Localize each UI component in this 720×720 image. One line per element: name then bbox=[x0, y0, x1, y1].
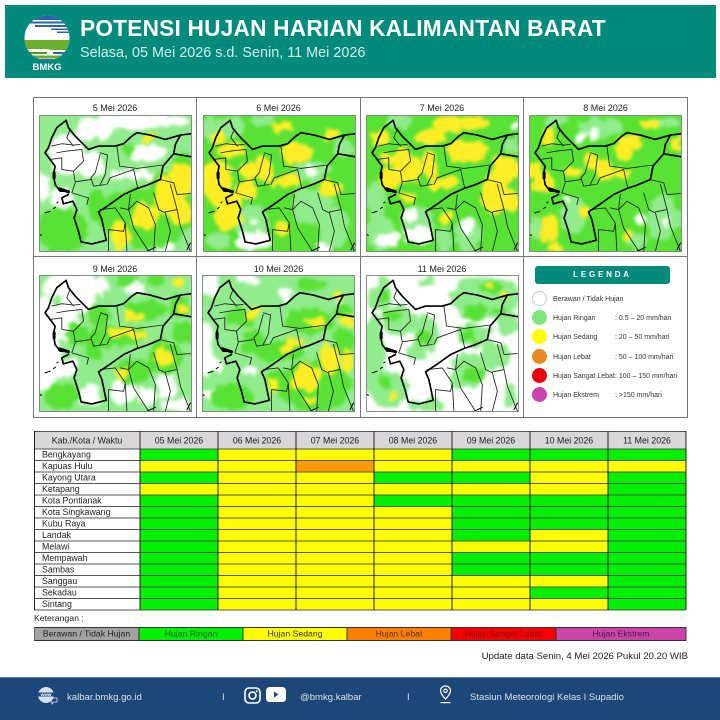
map bbox=[202, 275, 355, 412]
table header: 05 Mei 2026 bbox=[155, 436, 203, 446]
legend title: LEGENDA bbox=[573, 270, 632, 279]
panel: map 10 Mei bbox=[196, 256, 361, 418]
icon: BMKG logo bbox=[24, 16, 70, 73]
category: berawan: Berawan / Tidak Hujan bbox=[43, 628, 130, 638]
legend item: lebat bbox=[532, 349, 673, 364]
date label: 7 Mei 2026 bbox=[420, 103, 464, 113]
legend caption: Keterangan : bbox=[34, 613, 84, 623]
separator: I bbox=[407, 692, 410, 703]
legend item: ringan: Hujan Ringan bbox=[553, 315, 595, 322]
row: Ketapang bbox=[42, 484, 686, 495]
row: Kota Singkawang: Kota Singkawang bbox=[42, 507, 111, 517]
date label: 10 Mei 2026 bbox=[254, 264, 303, 274]
row: Sintang: Sintang bbox=[42, 599, 72, 609]
row: Bengkayang: Bengkayang bbox=[42, 450, 91, 460]
table header: 10 Mei 2026 bbox=[545, 436, 593, 446]
row: Sekadau: Sekadau bbox=[42, 588, 77, 598]
row: Landak bbox=[42, 530, 686, 541]
category: ringan bbox=[139, 628, 243, 640]
legend item: ringan: : 0.5 – 20 mm/hari bbox=[615, 315, 671, 322]
row: Kapuas Hulu bbox=[42, 460, 686, 472]
panel: legend bbox=[523, 256, 688, 418]
date label: 9 Mei 2026 bbox=[93, 264, 137, 274]
category: ekstrem bbox=[556, 628, 686, 640]
panel: map 11 Mei bbox=[360, 256, 524, 418]
legend item: lebat: : 50 – 100 mm/hari bbox=[615, 354, 673, 361]
rain category strip bbox=[34, 627, 686, 641]
row: Kubu Raya bbox=[42, 518, 686, 530]
category: lebat: Hujan Lebat bbox=[376, 628, 423, 638]
row: Mempawah: Mempawah bbox=[42, 553, 88, 563]
table header: 08 Mei 2026 bbox=[389, 436, 437, 446]
category: ekstrem: Hujan Ekstrem bbox=[593, 628, 649, 638]
date label: 5 Mei 2026 bbox=[93, 103, 137, 113]
map bbox=[39, 115, 192, 252]
legend item: sangat lebat: Hujan Sangat Lebat bbox=[553, 373, 615, 380]
row: Sanggau bbox=[42, 576, 686, 587]
row: Kapuas Hulu: Kapuas Hulu bbox=[42, 461, 92, 471]
panel: map 5 Mei bbox=[33, 97, 197, 257]
panel: map 6 Mei bbox=[196, 97, 361, 257]
row: Sambas bbox=[42, 564, 686, 576]
table header: 06 Mei 2026 bbox=[233, 436, 281, 446]
legend item: sedang: : 20 – 50 mm/hari bbox=[615, 334, 669, 341]
map bbox=[203, 115, 356, 252]
legend item: sedang bbox=[532, 329, 669, 344]
legend title bbox=[535, 266, 670, 284]
row: Landak: Landak bbox=[42, 530, 71, 540]
legend item: lebat: Hujan Lebat bbox=[553, 354, 591, 361]
date label: 11 Mei 2026 bbox=[418, 264, 466, 274]
row: Bengkayang bbox=[42, 449, 686, 460]
icon: website bbox=[38, 687, 58, 705]
row: Ketapang: Ketapang bbox=[42, 484, 80, 494]
map bbox=[529, 115, 682, 252]
table header: 07 Mei 2026 bbox=[311, 436, 359, 446]
row: Sambas: Sambas bbox=[42, 564, 75, 574]
row: Melawi bbox=[42, 541, 686, 552]
row: Sanggau: Sanggau bbox=[42, 576, 77, 586]
icon: instagram bbox=[244, 687, 261, 704]
update note: Update data Senin, 4 Mei 2026 Pukul 20.20 WIB bbox=[482, 651, 688, 662]
category: sangat lebat bbox=[451, 628, 556, 640]
legend item: sangat lebat: : 100 – 150 mm/hari bbox=[615, 373, 677, 380]
legend item: ekstrem: Hujan Ekstrem bbox=[553, 392, 599, 399]
subtitle: Selasa, 05 Mei 2026 s.d. Senin, 11 Mei 2026 bbox=[80, 45, 365, 61]
map bbox=[366, 115, 519, 252]
header banner bbox=[5, 5, 716, 78]
row: Sintang bbox=[42, 598, 686, 610]
row: Kota Singkawang bbox=[42, 506, 686, 518]
row: Melawi: Melawi bbox=[42, 542, 69, 552]
icon: location pin bbox=[440, 685, 452, 704]
title: POTENSI HUJAN HARIAN KALIMANTAN BARAT bbox=[80, 15, 606, 41]
row: Kota Pontianak bbox=[42, 495, 686, 506]
legend item: ekstrem bbox=[532, 387, 662, 402]
row: Kayong Utara: Kayong Utara bbox=[42, 472, 96, 482]
legend item: berawan bbox=[532, 291, 623, 306]
station name: Stasiun Meteorologi Kelas I Supadio bbox=[470, 692, 624, 703]
icon: BMKG logo: BMKG bbox=[32, 62, 62, 73]
table header: Kab./Kota / Waktu bbox=[52, 436, 122, 446]
row: Kota Pontianak: Kota Pontianak bbox=[42, 496, 102, 506]
website text: kalbar.bmkg.go.id bbox=[67, 692, 142, 703]
table header: 09 Mei 2026 bbox=[467, 436, 515, 446]
legend item: berawan: Berawan / Tidak Hujan bbox=[553, 296, 623, 303]
legend item: sedang: Hujan Sedang bbox=[553, 334, 597, 341]
map bbox=[39, 275, 192, 412]
separator: I bbox=[222, 692, 225, 703]
category: sedang: Hujan Sedang bbox=[267, 628, 323, 638]
rainfall table bbox=[34, 431, 686, 610]
panel: map 8 Mei bbox=[523, 97, 688, 257]
footer bbox=[0, 677, 720, 720]
social handle: @bmkg.kalbar bbox=[300, 692, 362, 703]
map bbox=[366, 275, 519, 412]
category: berawan bbox=[34, 628, 139, 640]
legend item: ringan bbox=[532, 310, 671, 325]
legend item: sangat lebat bbox=[532, 368, 677, 383]
row: Mempawah bbox=[42, 552, 686, 564]
category: lebat bbox=[347, 628, 451, 640]
table header: 11 Mei 2026 bbox=[623, 436, 671, 446]
row: Kubu Raya: Kubu Raya bbox=[42, 518, 86, 528]
date label: 8 Mei 2026 bbox=[583, 103, 628, 113]
panel: map 7 Mei bbox=[360, 97, 524, 257]
panel: map 9 Mei bbox=[33, 256, 197, 418]
legend item: ekstrem: : >150 mm/hari bbox=[615, 392, 662, 399]
category: ringan: Hujan Ringan bbox=[165, 628, 217, 638]
row: Kayong Utara bbox=[42, 472, 686, 484]
icon: website: www bbox=[40, 692, 52, 697]
icon: youtube bbox=[266, 687, 286, 702]
table header bbox=[34, 431, 686, 449]
date label: 6 Mei 2026 bbox=[256, 103, 301, 113]
row: Sekadau bbox=[42, 587, 686, 598]
category: sedang bbox=[243, 628, 347, 640]
category: sangat lebat: Hujan Sangat Lebat bbox=[465, 628, 542, 638]
